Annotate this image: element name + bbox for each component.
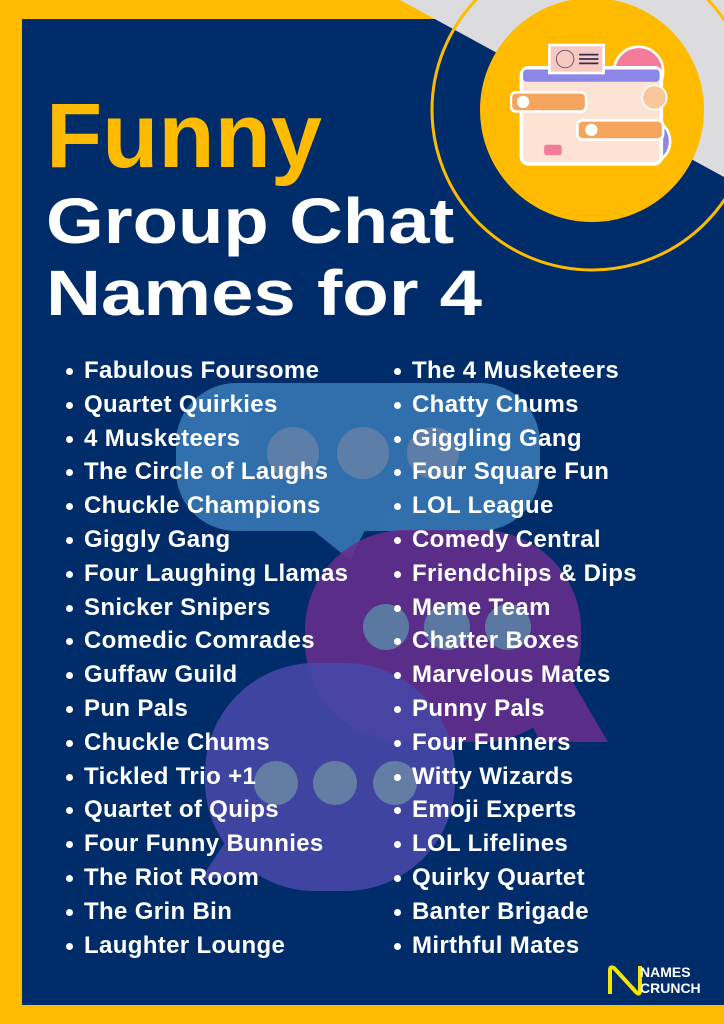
list: left column: Guffaw Guild xyxy=(84,661,238,688)
list: right column: Marvelous Mates xyxy=(412,661,611,688)
list: right column: Quirky Quartet xyxy=(412,864,585,891)
chat bubble indigo xyxy=(200,663,455,891)
list: left column: 4 Musketeers xyxy=(84,425,240,452)
title: Group Chat xyxy=(46,185,454,257)
list: right column: Meme Team xyxy=(412,594,551,621)
list: right column: The 4 Musketeers xyxy=(412,357,619,384)
logo: CRUNCH xyxy=(640,980,701,996)
list: right column: Chatter Boxes xyxy=(412,627,579,654)
chat bubble purple xyxy=(305,530,608,742)
chat bubble blue xyxy=(176,383,540,560)
list: left column: Comedic Comrades xyxy=(84,627,315,654)
list: right column: Emoji Experts xyxy=(412,796,577,823)
list: right column: LOL League xyxy=(412,492,554,519)
list: right column xyxy=(394,357,637,959)
list: right column: Punny Pals xyxy=(412,695,545,722)
list: left column: Chuckle Chums xyxy=(84,729,270,756)
list: left column: Laughter Lounge xyxy=(84,932,285,959)
illustration: chat app xyxy=(510,44,672,166)
list: right column: Witty Wizards xyxy=(412,763,573,790)
list: left column: Four Funny Bunnies xyxy=(84,830,324,857)
list: left column: The Grin Bin xyxy=(84,898,232,925)
title: Names for 4 xyxy=(46,257,482,329)
logo xyxy=(608,964,701,996)
list: left column: Tickled Trio +1 xyxy=(84,763,256,790)
list: right column: Comedy Central xyxy=(412,526,601,553)
logo: NAMES xyxy=(640,964,691,980)
list: right column: Giggling Gang xyxy=(412,425,582,452)
list: right column: Friendchips & Dips xyxy=(412,560,637,587)
list: left column: The Riot Room xyxy=(84,864,259,891)
list: left column: Quartet of Quips xyxy=(84,796,279,823)
list: right column: Four Square Fun xyxy=(412,458,609,485)
list: right column: Four Funners xyxy=(412,729,571,756)
list: left column: Quartet Quirkies xyxy=(84,391,278,418)
list: right column: Banter Brigade xyxy=(412,898,589,925)
list: right column: Mirthful Mates xyxy=(412,932,580,959)
list: left column: Chuckle Champions xyxy=(84,492,321,519)
list: left column: The Circle of Laughs xyxy=(84,458,328,485)
title: Funny xyxy=(46,85,322,187)
list: left column: Four Laughing Llamas xyxy=(84,560,348,587)
list: left column: Snicker Snipers xyxy=(84,594,271,621)
list: left column: Giggly Gang xyxy=(84,526,231,553)
list: right column: Chatty Chums xyxy=(412,391,579,418)
list: left column: Fabulous Foursome xyxy=(84,357,319,384)
title xyxy=(46,85,482,329)
list: left column xyxy=(66,357,348,959)
list: left column: Pun Pals xyxy=(84,695,188,722)
list: right column: LOL Lifelines xyxy=(412,830,568,857)
